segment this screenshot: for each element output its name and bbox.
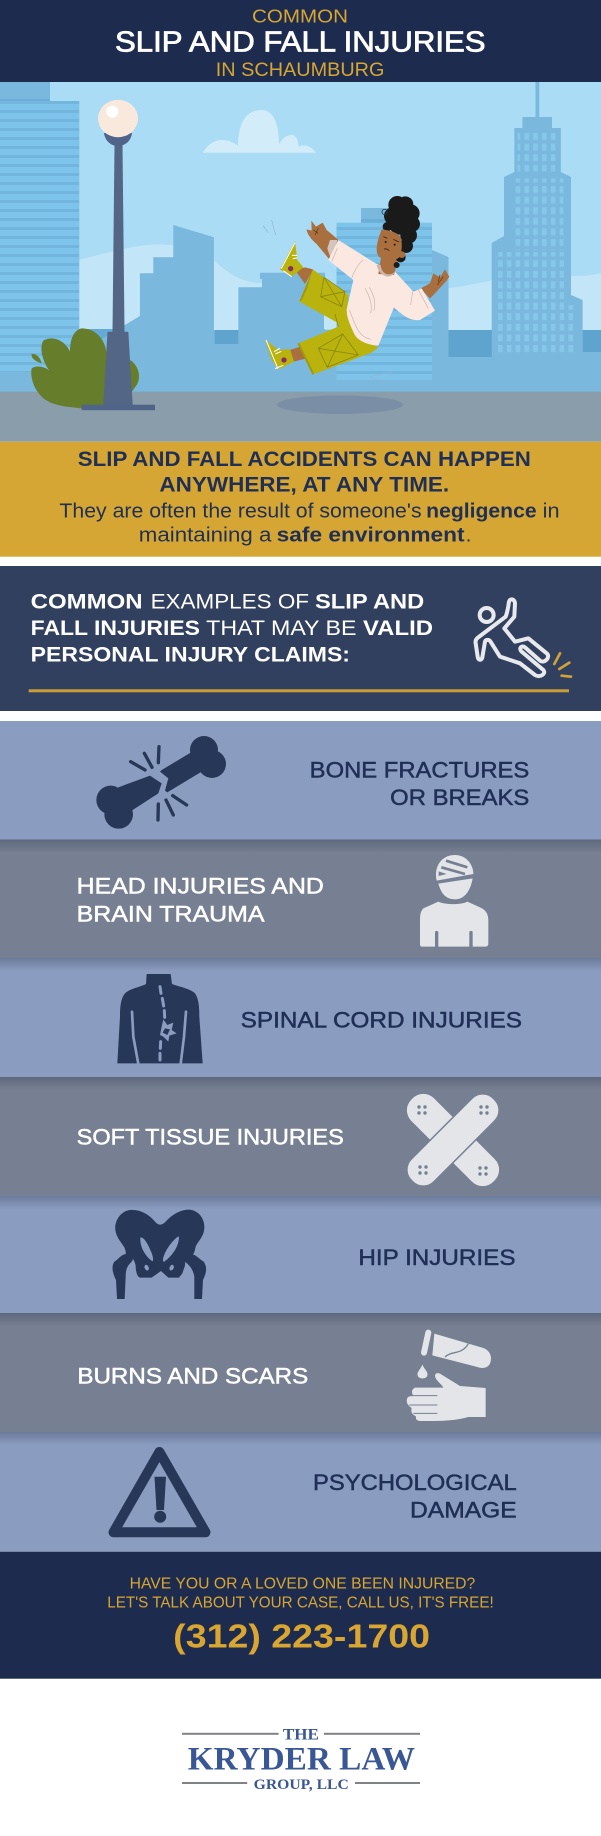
header banner	[0, 0, 601, 82]
panel: spinal cord injuries	[0, 958, 601, 1077]
icon: chemical burn on hand	[407, 1333, 491, 1421]
panel: intro statement: SLIP AND FALL ACCIDENTS CAN HAPPEN	[78, 448, 531, 471]
panel: intro statement	[0, 442, 601, 557]
panel: soft tissue injuries	[0, 1077, 601, 1196]
panel: soft tissue injuries: SOFT TISSUE INJURIES	[77, 1124, 344, 1149]
icon: street lamp	[82, 100, 155, 410]
header banner: IN SCHAUMBURG	[216, 60, 384, 81]
panel: call to action	[0, 1552, 601, 1679]
header banner: SLIP AND FALL INJURIES	[115, 27, 486, 59]
panel: common examples heading	[0, 566, 601, 711]
panel: hip injuries: HIP INJURIES	[358, 1245, 516, 1270]
panel: intro statement: safe environment	[277, 525, 465, 547]
panel: bone fractures: OR BREAKS	[390, 785, 529, 810]
icon: crossed bandages	[401, 1088, 505, 1192]
panel: bone fractures: BONE FRACTURES	[310, 758, 529, 783]
header banner: COMMON	[252, 6, 348, 27]
icon: person slipping	[476, 599, 571, 677]
icon: pelvis	[113, 1210, 206, 1299]
panel: head injuries: BRAIN TRAUMA	[77, 901, 264, 926]
icon: broken bone	[96, 736, 226, 829]
panel: intro statement: in	[543, 500, 560, 522]
panel: head injuries: HEAD INJURIES AND	[77, 873, 324, 898]
panel: common examples heading: THAT MAY BE	[206, 617, 356, 640]
panel: psychological damage: PSYCHOLOGICAL	[313, 1470, 517, 1495]
panel: burns and scars	[0, 1313, 601, 1432]
illustration: falling person	[263, 196, 449, 381]
panel: common examples heading: COMMON	[31, 590, 143, 613]
panel: intro statement: maintaining a	[139, 525, 272, 547]
panel: call to action: HAVE YOU OR A LOVED ONE BEEN INJURED?	[130, 1575, 475, 1592]
logo: The Kryder Law Group: KRYDER LAW	[188, 1741, 415, 1777]
panel: hip injuries	[0, 1196, 601, 1313]
icon: shrub	[31, 328, 139, 408]
illustration: city street scene	[0, 82, 601, 442]
panel: spinal cord injuries: SPINAL CORD INJURIES	[241, 1007, 522, 1032]
panel: common examples heading: SLIP AND	[315, 590, 424, 613]
panel: burns and scars: BURNS AND SCARS	[77, 1363, 308, 1388]
panel: head injuries	[0, 840, 601, 958]
panel: common examples heading: EXAMPLES OF	[151, 590, 309, 613]
logo: The Kryder Law Group: THE	[283, 1726, 319, 1743]
icon: bandaged head	[420, 855, 488, 947]
panel: call to action: (312) 223-1700	[173, 1617, 430, 1654]
panel: psychological damage: DAMAGE	[410, 1498, 517, 1523]
panel: bone fractures	[0, 721, 601, 840]
icon: warning triangle	[114, 1452, 206, 1532]
panel: common examples heading: VALID	[363, 617, 433, 640]
panel: intro statement: negligence	[426, 500, 537, 522]
panel: call to action: LET'S TALK ABOUT YOUR CASE, CALL US, IT'S FREE!	[107, 1594, 494, 1611]
panel: psychological damage	[0, 1432, 601, 1552]
panel: intro statement: They are often the result of someone's	[59, 500, 422, 522]
panel: common examples heading: PERSONAL INJURY CLAIMS:	[31, 643, 350, 666]
panel: intro statement: .	[466, 525, 471, 547]
panel: intro statement: ANYWHERE, AT ANY TIME.	[159, 474, 449, 497]
panel: common examples heading: FALL INJURIES	[31, 617, 200, 640]
logo: The Kryder Law Group	[182, 1726, 420, 1793]
icon: injured spine	[117, 974, 203, 1064]
logo: The Kryder Law Group: GROUP, LLC	[254, 1777, 349, 1793]
